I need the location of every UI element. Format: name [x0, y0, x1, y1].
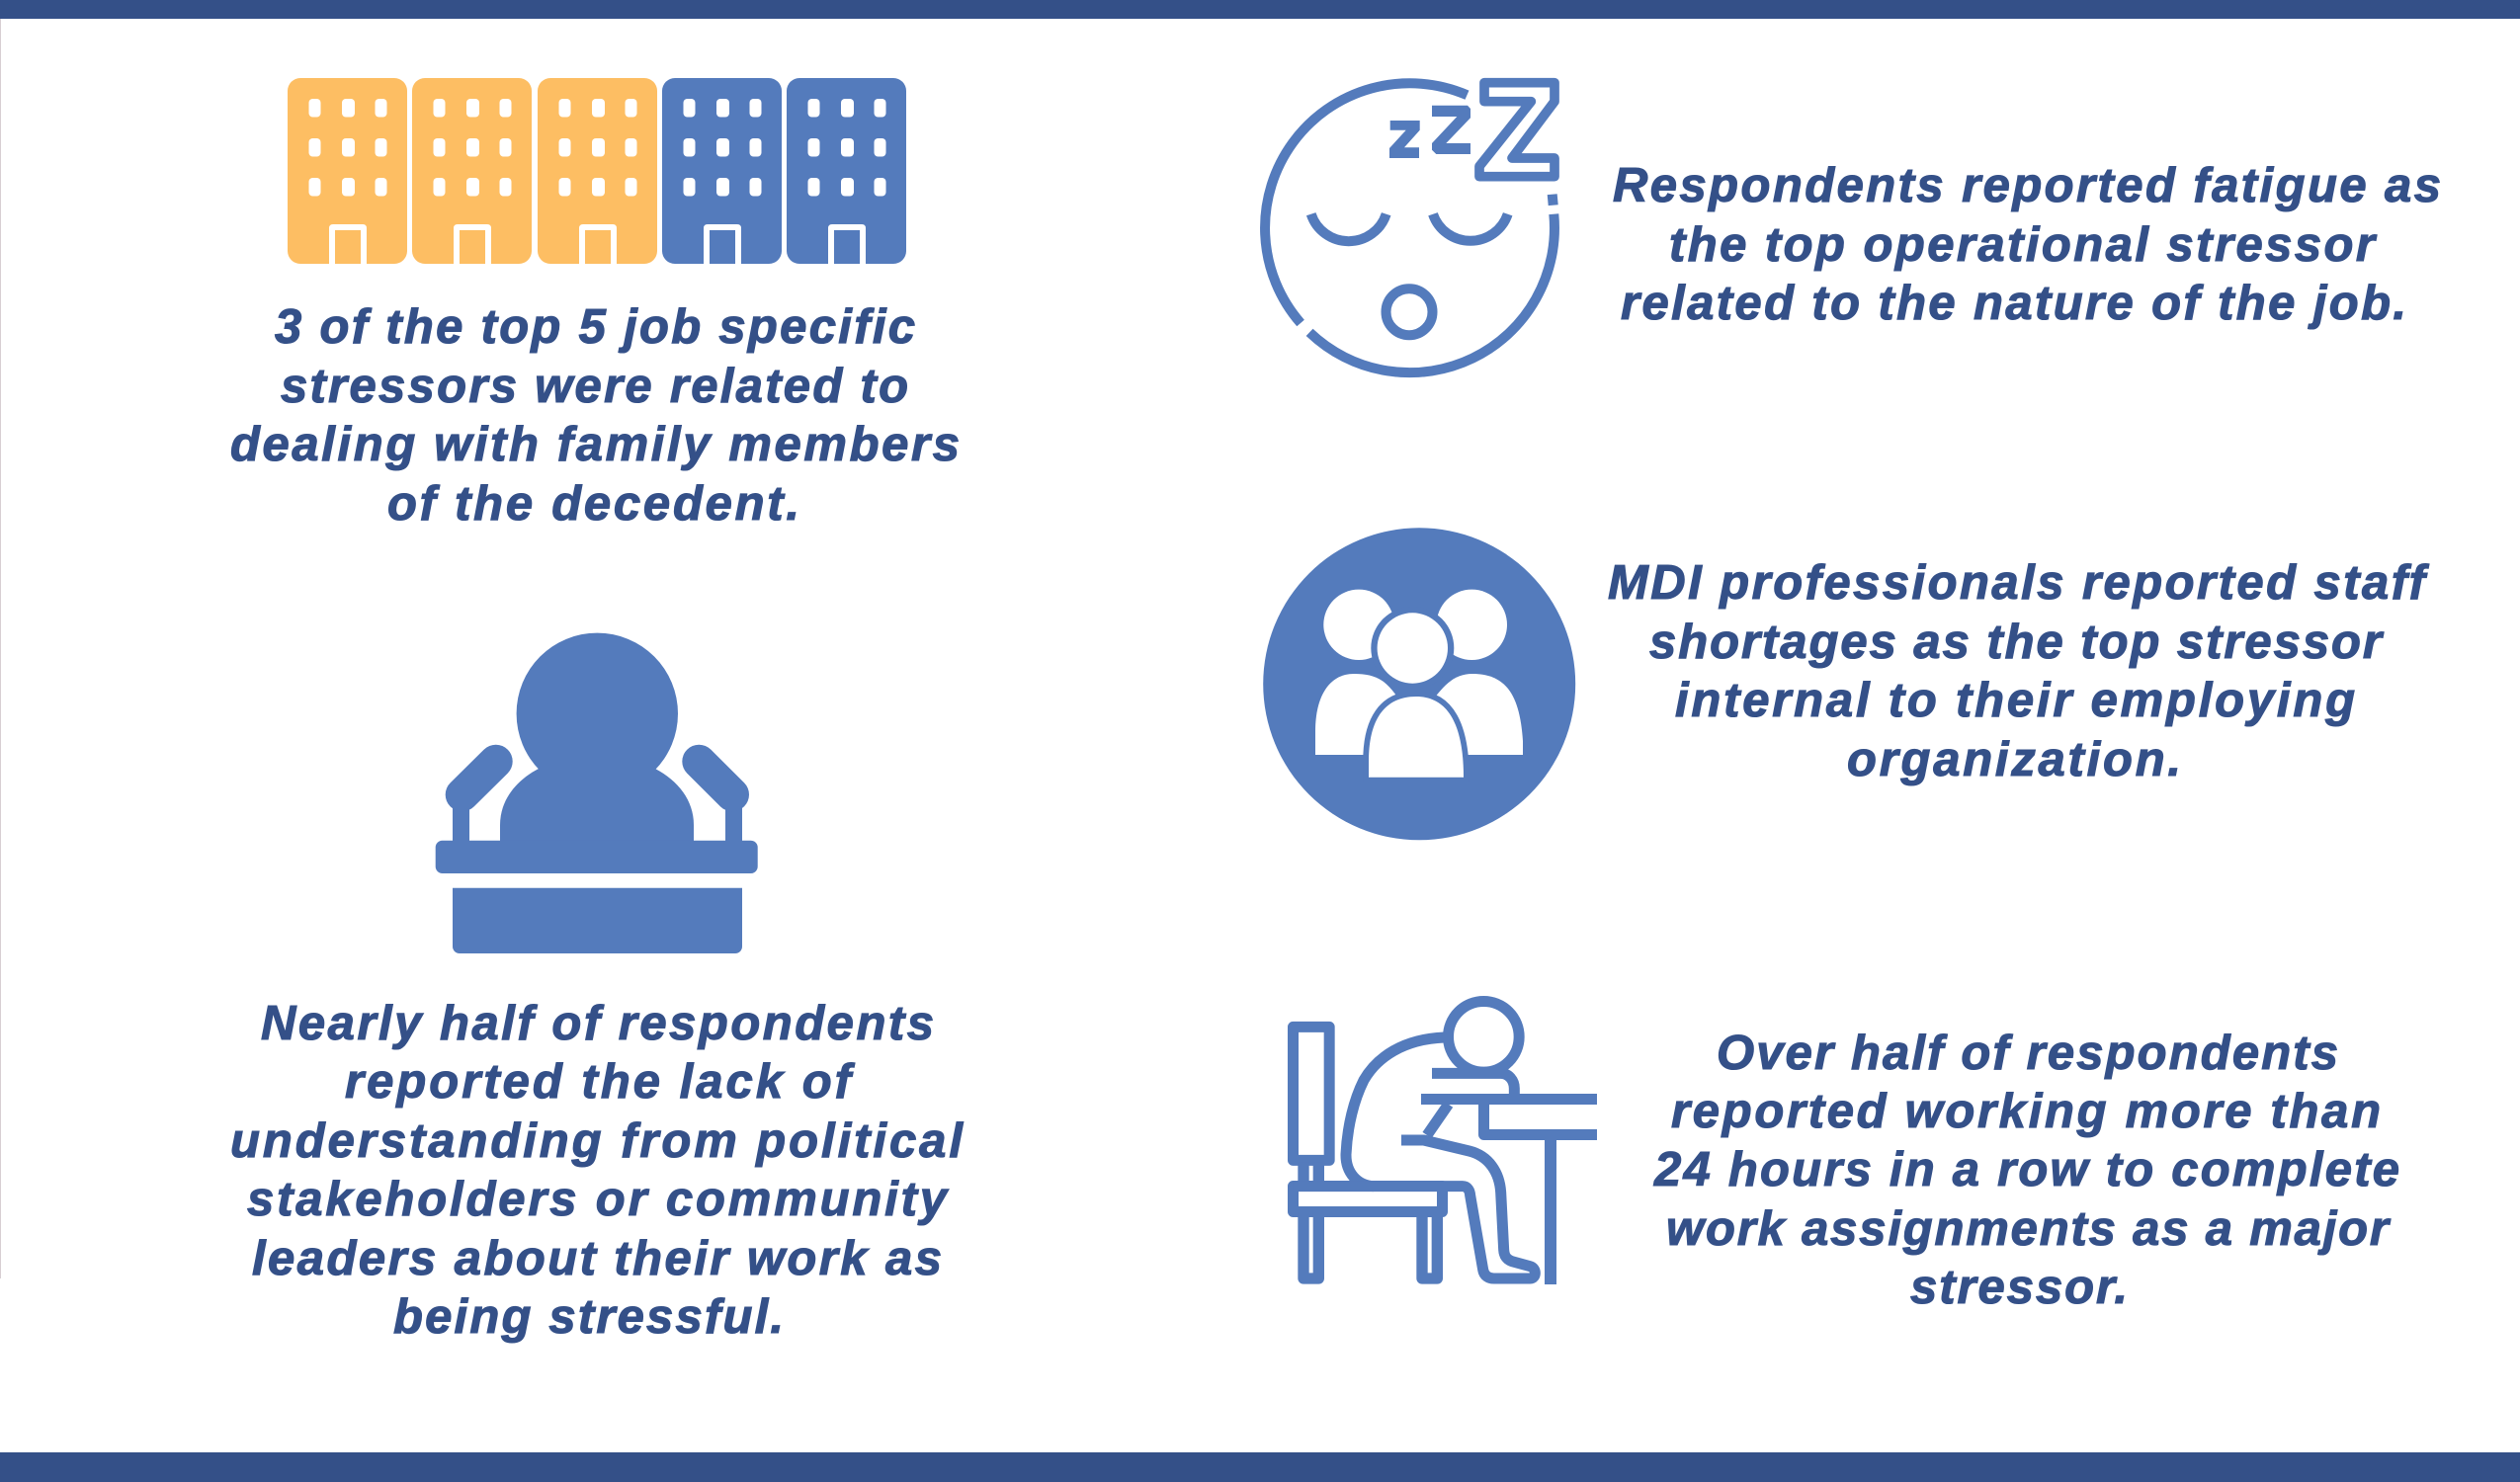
icon: sleeping face — [1265, 83, 1554, 372]
top bar — [0, 0, 2520, 19]
text: family members stressor: of the decedent. — [387, 477, 799, 531]
text: political stakeholders stressor: leaders about their work as — [252, 1232, 942, 1285]
icon: group of people in circle — [1263, 528, 1575, 840]
text: political stakeholders stressor — [230, 997, 964, 1344]
text: 24 hours stressor: work assignments as a major — [1666, 1202, 2392, 1256]
text: family members stressor: 3 of the top 5 job specific — [275, 300, 915, 354]
text: fatigue stressor: the top operational stressor — [1669, 218, 2378, 272]
text: fatigue stressor: related to the nature of the job. — [1621, 277, 2406, 330]
text: family members stressor — [230, 300, 960, 531]
text: staff shortages stressor: shortages as the top stressor — [1649, 616, 2385, 669]
text: family members stressor: stressors were related to — [281, 360, 908, 413]
text: fatigue stressor — [1613, 159, 2441, 330]
icon: exhausted person at desk — [1293, 1001, 1597, 1284]
text: political stakeholders stressor: stakeholders or community — [247, 1173, 950, 1226]
text: political stakeholders stressor: Nearly half of respondents — [261, 997, 934, 1050]
text: staff shortages stressor: organization. — [1847, 733, 2181, 786]
text: staff shortages stressor: MDI professionals reported staff — [1608, 556, 2430, 610]
text: 24 hours stressor: stressor. — [1910, 1261, 2128, 1314]
text: 24 hours stressor: 24 hours in a row to complete — [1653, 1143, 2399, 1196]
icon: five buildings, three highlighted — [288, 78, 906, 264]
left edge line — [0, 19, 1, 1278]
text: fatigue stressor: Respondents reported fatigue as — [1613, 159, 2441, 212]
text: political stakeholders stressor: being stressful. — [393, 1290, 784, 1344]
text: staff shortages stressor: internal to their employing — [1675, 674, 2355, 727]
text: political stakeholders stressor: understanding from political — [230, 1114, 964, 1168]
bottom bar — [0, 1452, 2520, 1482]
icon: speaker at podium — [436, 633, 758, 953]
text: 24 hours stressor — [1653, 1027, 2399, 1314]
text: staff shortages stressor — [1608, 556, 2430, 786]
text: political stakeholders stressor: reported the lack of — [345, 1055, 856, 1109]
text: 24 hours stressor: Over half of respondents — [1717, 1027, 2338, 1080]
text: family members stressor: dealing with family members — [230, 418, 960, 471]
text: 24 hours stressor: reported working more than — [1671, 1085, 2381, 1138]
